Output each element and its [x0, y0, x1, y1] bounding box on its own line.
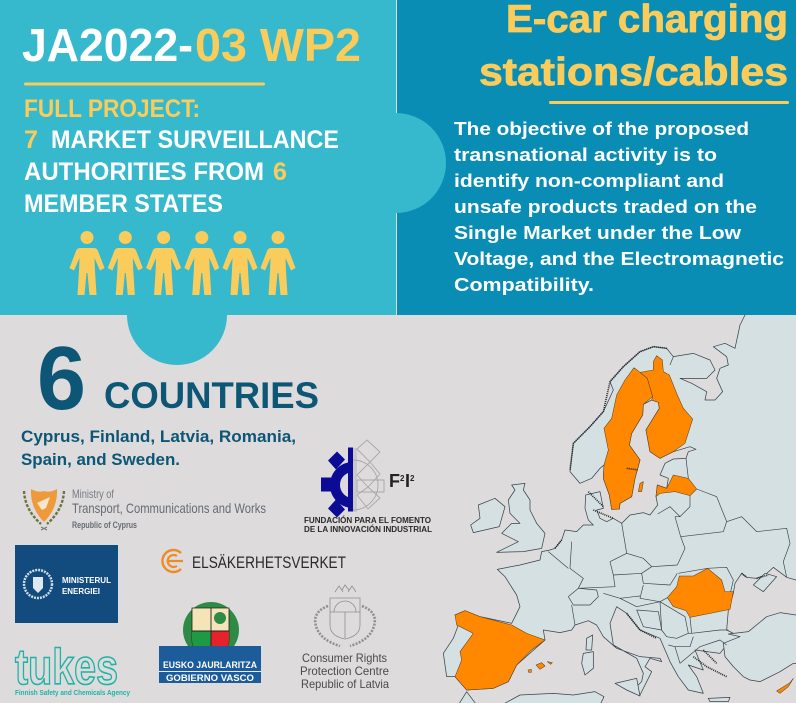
Ireland	[471, 498, 505, 533]
logo: F2I2 foundation: FUNDACIÓN PARA EL FOMENTO	[304, 516, 431, 525]
Stockholm archipelago	[627, 468, 638, 470]
heading: 6 countries: 6	[37, 329, 86, 429]
logo: Elsäkerhetsverket: ELSÄKERHETSVERKET	[192, 554, 346, 572]
logo: F2I2 foundation: I	[405, 471, 410, 491]
logo: Ministerul Energiei: ENERGIEI	[62, 587, 100, 596]
logo: Basque government: EUSKO JAURLARITZA	[163, 660, 257, 670]
logo: Tukes: Finnish Safety and Chemicals Agency	[15, 688, 131, 697]
Corsica	[586, 635, 593, 650]
logo: F2I2 foundation	[304, 440, 432, 534]
text block: full project: 7	[24, 126, 38, 154]
text block: full project: AUTHORITIES FROM	[24, 158, 264, 186]
logo: Ministerul Energiei: MINISTERUL	[62, 576, 111, 585]
text block: full project: MARKET SURVEILLANCE	[51, 126, 339, 154]
text block: objective: Compatibility.	[454, 274, 594, 295]
Finland	[640, 356, 693, 458]
Turkey	[723, 613, 796, 682]
logo: Cyprus ministry: Transport, Communications and Works	[72, 500, 266, 516]
Gotland	[638, 482, 643, 492]
logo: Cyprus ministry	[24, 487, 266, 531]
Spain	[455, 611, 545, 690]
North Africa coast	[458, 692, 604, 703]
text block: objective: transnational activity is to	[454, 144, 717, 165]
title: 03 WP2	[195, 19, 361, 71]
Balearic Islands	[528, 662, 552, 672]
Country borders	[548, 357, 790, 663]
text block: country list: Cyprus, Finland, Latvia, Romania,	[21, 428, 296, 446]
Sardinia	[582, 652, 593, 675]
text block: full project	[24, 95, 339, 218]
heading: E-car charging stations/cables: stations/cables	[479, 51, 788, 94]
logo: Basque government	[159, 602, 261, 683]
text block: country list: Spain, and Sweden.	[21, 451, 180, 469]
connector tab: bottom bulge	[127, 315, 227, 365]
Latvia	[656, 475, 697, 497]
text block: objective: identify non-compliant and	[454, 170, 724, 191]
logo: Cyprus ministry: Ministry of	[72, 487, 115, 501]
logo: Tukes: tukes	[15, 639, 118, 695]
text block: full project: MEMBER STATES	[24, 190, 223, 218]
Coastline detail	[555, 347, 768, 677]
panel: project	[0, 0, 396, 315]
logo: F2I2 foundation: DE LA INNOVACIÓN INDUSTRIAL	[304, 525, 432, 534]
heading: 6 countries: COUNTRIES	[104, 375, 319, 416]
Romania	[667, 568, 733, 617]
icon: six people	[70, 231, 296, 295]
text block: objective: unsafe products traded on the	[454, 196, 757, 217]
Crete	[708, 697, 730, 702]
Crimea	[753, 573, 777, 592]
panel: grey background	[0, 315, 796, 703]
text block: full project: 6	[273, 158, 287, 186]
title	[22, 19, 361, 71]
text block: objective: The objective of the proposed	[454, 118, 749, 139]
title: JA2022-	[22, 19, 193, 71]
mainland Europe	[443, 283, 796, 695]
logo: F2I2 foundation: 2	[400, 474, 405, 483]
logo: F2I2 foundation: 2	[410, 474, 415, 483]
logo: Latvia consumer rights: Protection Centre	[300, 664, 389, 678]
logo: Basque government: GOBIERNO VASCO	[166, 673, 254, 683]
text block: full project: FULL PROJECT:	[24, 95, 200, 123]
logo: Latvia consumer rights: Republic of Latvia	[301, 677, 389, 691]
Cyprus	[777, 678, 793, 693]
panel: objective	[397, 0, 796, 315]
logo: F2I2 foundation: F	[389, 471, 400, 491]
logo: Ministerul Energiei	[15, 545, 118, 623]
logo: Latvia consumer rights	[300, 585, 389, 691]
Sweden	[603, 368, 653, 509]
map of Europe	[443, 283, 796, 703]
text block: objective: Single Market under the Low	[454, 222, 742, 243]
heading: 6 countries	[37, 329, 319, 429]
logo: Cyprus ministry: Republic of Cyprus	[72, 520, 137, 531]
text block: objective: Voltage, and the Electromagnetic	[454, 248, 784, 269]
Sicily	[615, 678, 640, 696]
text block: objective	[454, 118, 784, 295]
Great Britain	[497, 483, 545, 552]
heading: E-car charging stations/cables	[479, 0, 788, 94]
text block: country list	[21, 428, 296, 469]
connector tab: right bulge	[396, 113, 446, 213]
logo: Elsäkerhetsverket	[162, 550, 346, 572]
logo: Latvia consumer rights: Consumer Rights	[302, 651, 387, 665]
